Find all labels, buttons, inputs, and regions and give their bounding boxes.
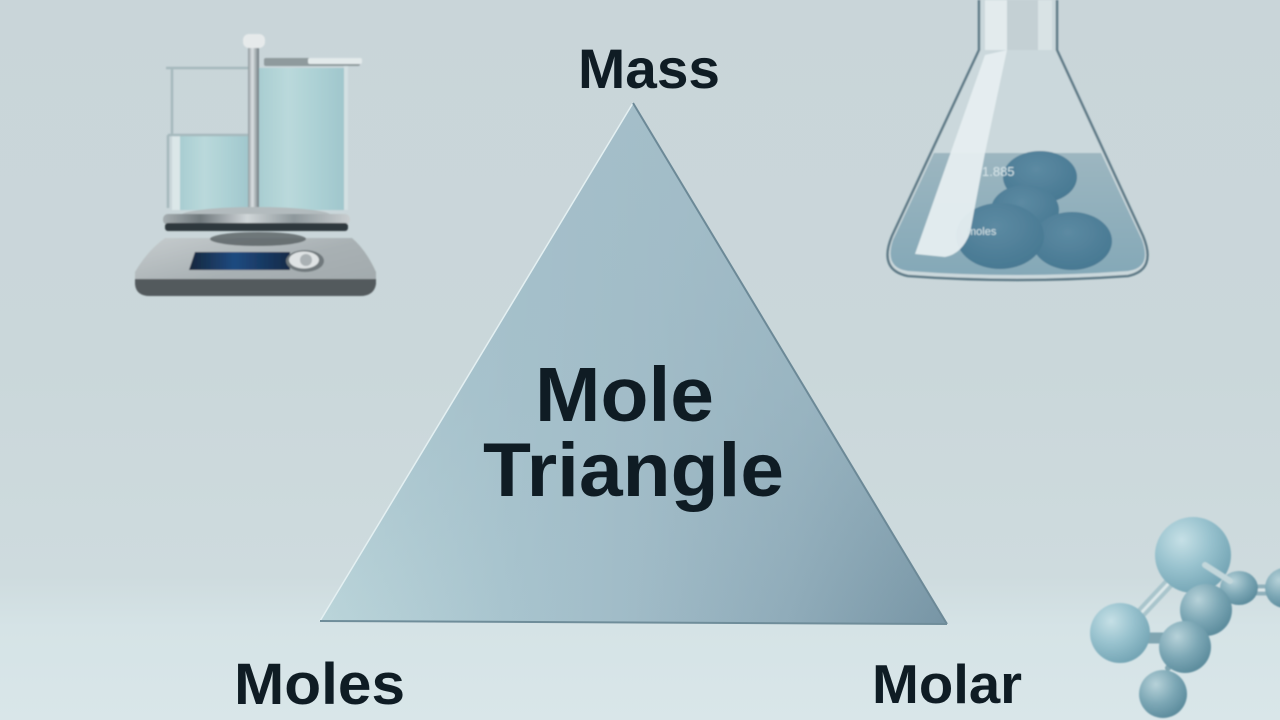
bonds xyxy=(1142,565,1272,668)
flask markings: 1.885 xyxy=(982,164,1015,179)
icon: flask with spheres xyxy=(888,0,1148,280)
heading: Mole Triangle: Triangle xyxy=(483,428,784,513)
heading: Mole Triangle xyxy=(483,352,784,513)
flask liquid xyxy=(891,153,1145,275)
icon: molecule xyxy=(1090,517,1280,718)
heading: Mole Triangle: Mole xyxy=(535,352,714,438)
balance rod xyxy=(243,34,265,208)
label: Molar: Molar xyxy=(872,653,1022,715)
label: Moles: Moles xyxy=(234,652,405,717)
scale dial xyxy=(286,250,324,272)
icon: balance with beakers xyxy=(135,34,376,296)
spheres xyxy=(956,151,1112,270)
flask markings: moles xyxy=(967,226,997,238)
flask glass xyxy=(888,0,1148,280)
glass highlight xyxy=(915,50,1007,257)
scale display xyxy=(189,252,290,270)
main triangle xyxy=(320,103,947,624)
flask outline xyxy=(888,0,1148,280)
balance pan xyxy=(163,207,350,231)
right beaker xyxy=(258,58,362,210)
flask markings xyxy=(967,164,1015,238)
scale body xyxy=(135,232,376,296)
left beaker xyxy=(166,68,250,210)
label: Mass: Mass xyxy=(578,37,720,100)
